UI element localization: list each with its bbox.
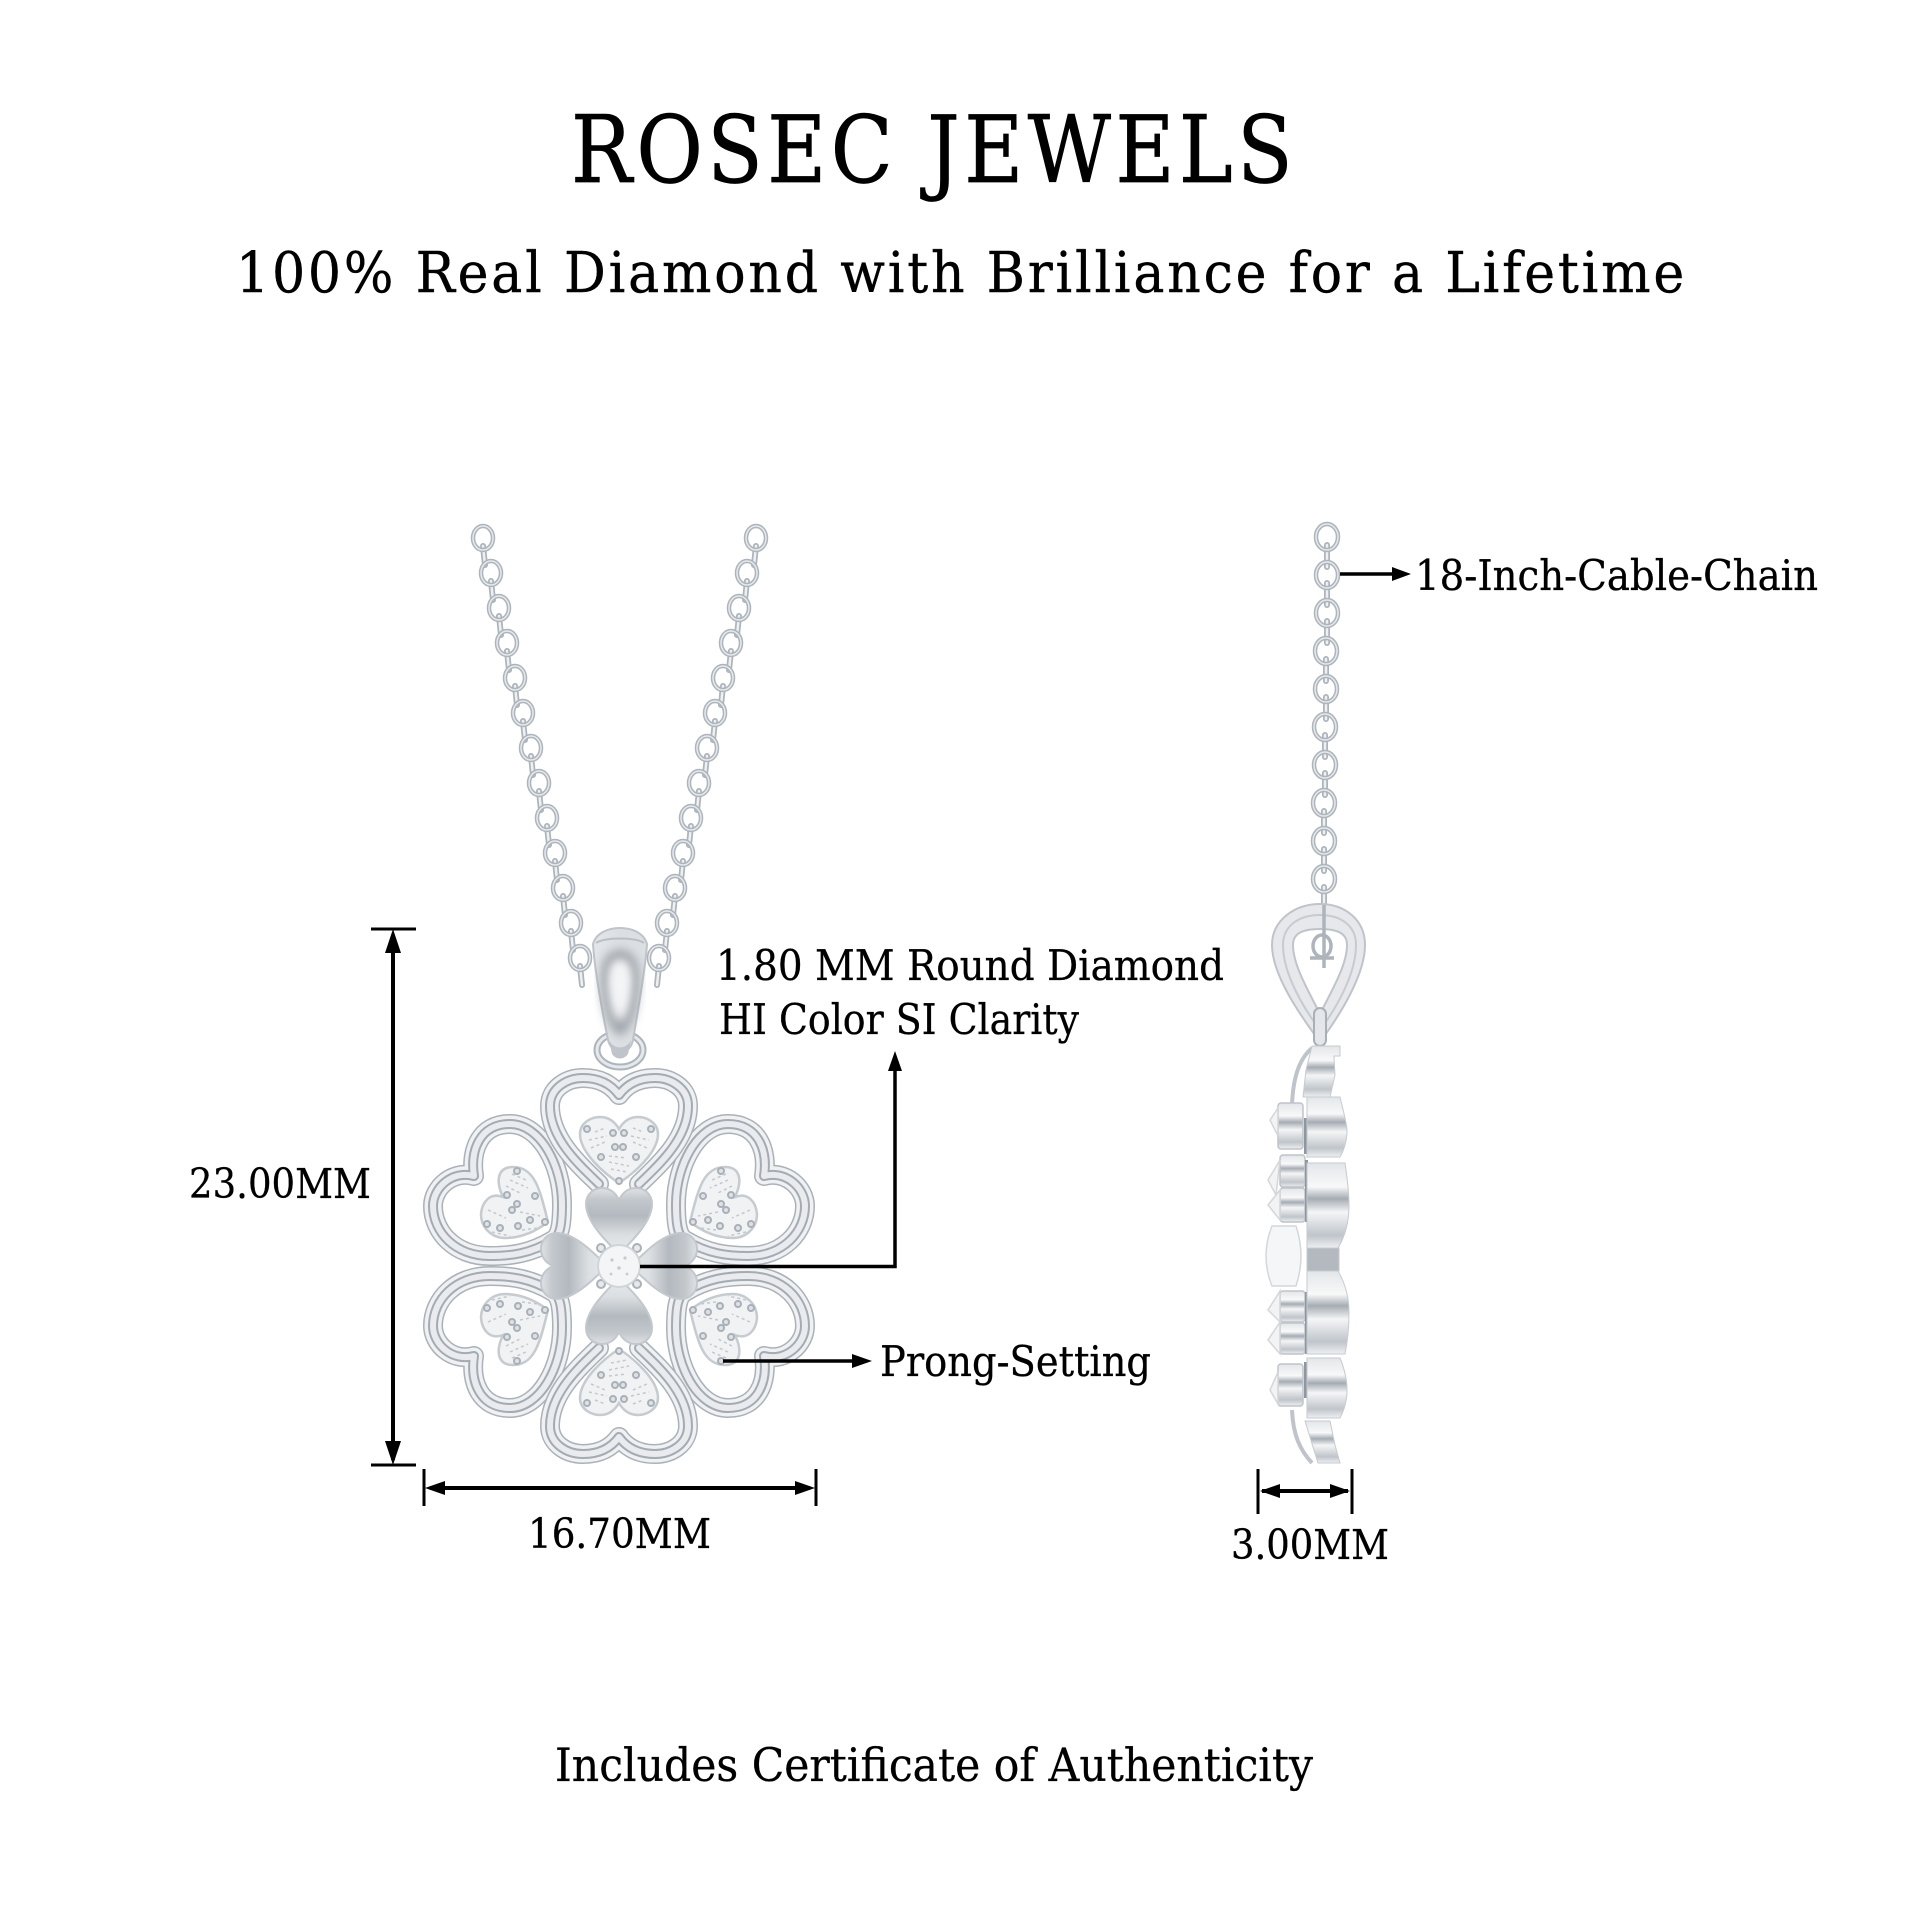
inner dark gap: [1304, 1118, 1308, 1398]
side chain: [1313, 524, 1338, 909]
inner bail chain loop: [1310, 905, 1334, 968]
outer bands: [1303, 1046, 1349, 1463]
label: prong setting: Prong-Setting: [880, 1337, 1151, 1386]
four solid hearts: [541, 1188, 697, 1344]
jump ring: [597, 1033, 643, 1067]
diamonds in profile: [1268, 1108, 1280, 1404]
side width dimension arrow: 3.00MM: [1258, 1469, 1352, 1514]
side bail: [1272, 904, 1365, 1042]
label: chain: 18-Inch-Cable-Chain: [1415, 551, 1818, 600]
subtitle: 100% Real Diamond with Brilliance for a Lifetime: [236, 241, 1687, 306]
bail contour line: [1283, 915, 1356, 1030]
label: diamond specification: [716, 941, 1224, 1044]
arrow: prong setting: [723, 1354, 872, 1368]
setting segments: [1278, 1103, 1305, 1406]
footer note: Includes Certificate of Authenticity: [555, 1738, 1313, 1792]
center round diamond: [597, 1244, 641, 1288]
label: diamond specification: HI Color SI Clarity: [719, 995, 1079, 1044]
label: diamond specification: 1.80 MM Round Diamond: [716, 941, 1224, 990]
vertical dimension arrow: 23.00MM: [371, 929, 416, 1465]
center stone in profile: [1266, 1226, 1301, 1286]
pendant: side view: [1266, 904, 1365, 1463]
side bail connector: [1314, 1008, 1326, 1046]
pendant: front view: [433, 928, 805, 1454]
title: ROSEC JEWELS: [571, 96, 1297, 204]
six open hearts: [433, 1078, 805, 1454]
label: side width: 3.00MM: [1231, 1521, 1389, 1569]
label: width: 16.70MM: [528, 1510, 711, 1558]
necklace chain: front view: [473, 526, 766, 985]
arrow: center diamond leader: [640, 1051, 902, 1266]
arrow: chain: [1340, 567, 1411, 581]
horizontal dimension arrow: 16.70MM: [424, 1469, 816, 1506]
back curve: [1292, 1048, 1312, 1463]
bail: [593, 928, 647, 1058]
label: height: 23.00MM: [189, 1160, 371, 1208]
